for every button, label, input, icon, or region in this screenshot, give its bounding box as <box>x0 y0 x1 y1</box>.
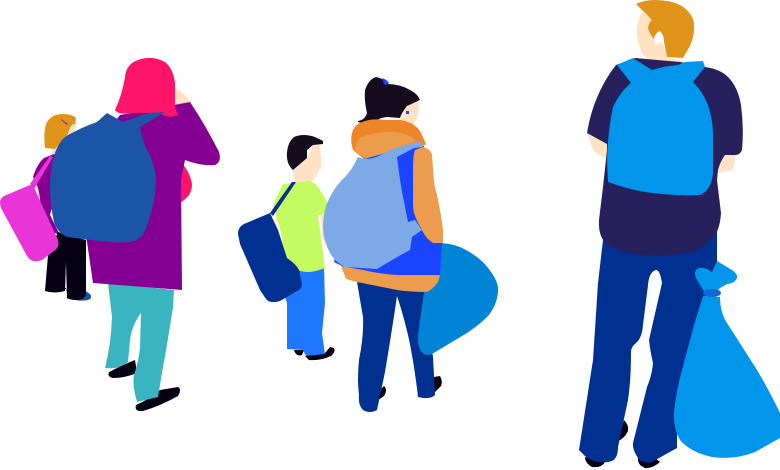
sack knot <box>703 289 721 297</box>
hair and ponytail <box>358 77 420 124</box>
navy trousers <box>357 282 435 412</box>
light blue backpack <box>323 141 423 269</box>
blue backpack <box>607 58 713 195</box>
sack tie <box>695 261 737 296</box>
figure: boy with navy bag <box>238 135 335 360</box>
hem <box>341 266 440 292</box>
vest <box>334 146 442 276</box>
navy shoulder bag <box>270 182 296 216</box>
figure: man with backpack and sack <box>579 0 780 468</box>
figure: woman with ponytail and round bag <box>323 77 498 412</box>
bag strap <box>30 156 53 189</box>
man's trousers <box>579 230 717 463</box>
navy shirt <box>587 58 743 256</box>
figure: girl with pink bag <box>0 114 91 301</box>
figure: woman with pink hair and backpack <box>50 58 220 411</box>
hood <box>351 119 426 160</box>
blue sack <box>674 296 780 458</box>
round blue bag <box>418 243 498 355</box>
pink hair <box>115 58 179 117</box>
man's head <box>637 12 684 64</box>
pink bag <box>0 185 58 261</box>
orange arm <box>413 147 443 243</box>
blue backpack <box>50 112 165 242</box>
